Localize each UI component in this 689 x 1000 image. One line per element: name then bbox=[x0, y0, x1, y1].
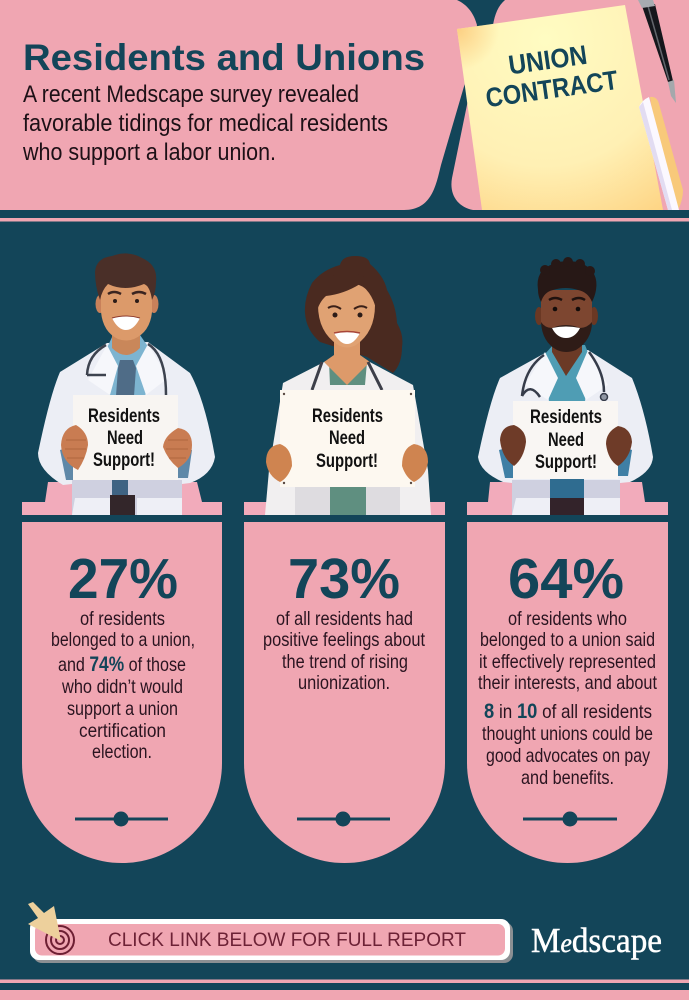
card 1 text: of residents bbox=[80, 608, 165, 630]
intro text bbox=[22, 81, 388, 166]
figure: male resident 2 with sign bbox=[478, 257, 653, 515]
icon: arrow pointer bbox=[28, 902, 61, 941]
card 3 text: belonged to a union said bbox=[480, 629, 655, 651]
icon: target bbox=[46, 926, 74, 954]
card 2 text: positive feelings about bbox=[263, 629, 425, 651]
card 1 top stripe bbox=[22, 482, 222, 515]
card 3 body bbox=[467, 522, 668, 863]
card 1 text: certification bbox=[79, 720, 166, 742]
button frame bbox=[30, 919, 513, 963]
bottom stripes bbox=[0, 980, 689, 1000]
card 3 top stripe bbox=[467, 482, 668, 515]
card 1 text: support a union bbox=[67, 698, 178, 720]
card 1 body bbox=[22, 522, 222, 863]
card 2 text: unionization. bbox=[298, 672, 390, 694]
button label: CLICK LINK BELOW FOR FULL REPORT bbox=[108, 930, 466, 951]
sign text: Support! bbox=[93, 450, 155, 471]
card 1 text: belonged to a union, bbox=[51, 629, 195, 651]
card 3 text bbox=[478, 608, 657, 789]
card 3 text: 8 in 10 of all residents bbox=[484, 700, 652, 723]
sign text: Need bbox=[548, 430, 584, 451]
card 3 stat: 64% bbox=[508, 547, 624, 611]
title: Residents and Unions bbox=[23, 37, 425, 78]
intro text: who support a labor union. bbox=[22, 139, 276, 166]
card 2 stat: 73% bbox=[288, 547, 400, 611]
call to action button bbox=[28, 902, 513, 963]
sign text: Residents bbox=[530, 407, 602, 428]
card 2 body bbox=[244, 522, 445, 863]
card 2 text: the trend of rising bbox=[282, 651, 408, 673]
stripe under header bbox=[0, 218, 689, 222]
card 2 top stripe bbox=[244, 502, 445, 515]
icon: union contract folder and pen: CONTRACT bbox=[484, 65, 620, 113]
sign text: Support! bbox=[316, 451, 378, 472]
intro text: A recent Medscape survey revealed bbox=[23, 81, 359, 108]
header pink shape left bbox=[0, 0, 477, 210]
figure: female resident with sign bbox=[265, 256, 431, 515]
sign text bbox=[312, 406, 383, 472]
card 3 text: and benefits. bbox=[521, 767, 614, 789]
card 3 text: good advocates on pay bbox=[486, 745, 650, 767]
sign text: Need bbox=[329, 428, 365, 449]
sign text bbox=[530, 407, 602, 473]
card 2 slider ornament bbox=[297, 812, 390, 826]
header panel bbox=[0, 0, 689, 210]
sign text: Support! bbox=[535, 452, 597, 473]
card 1 text bbox=[51, 608, 195, 763]
intro text: favorable tidings for medical residents bbox=[23, 110, 388, 137]
card 1 text: and 74% of those bbox=[58, 653, 186, 676]
card 2 text bbox=[263, 608, 425, 694]
card 3 text: of residents who bbox=[508, 608, 627, 630]
icon: union contract folder and pen bbox=[457, 0, 683, 210]
sign text: Residents bbox=[88, 406, 160, 427]
card 3 text: it effectively represented bbox=[479, 651, 656, 673]
Medscape logo: Medscape bbox=[531, 921, 662, 960]
panel: card 2 bbox=[244, 502, 445, 863]
card 3 slider ornament bbox=[523, 812, 617, 826]
panel: card 1 bbox=[22, 482, 222, 863]
icon: union contract folder and pen: UNION bbox=[507, 40, 589, 80]
sign text bbox=[88, 406, 160, 471]
card 1 slider ornament bbox=[75, 812, 168, 826]
card 3 text: their interests, and about bbox=[478, 672, 657, 694]
figure: male resident 1 with sign bbox=[38, 253, 215, 515]
sign text: Need bbox=[107, 428, 143, 449]
card 1 text: election. bbox=[92, 741, 152, 763]
card 1 text: who didn’t would bbox=[61, 676, 183, 698]
header pink shape right bbox=[451, 0, 689, 210]
sign text: Residents bbox=[312, 406, 383, 427]
card 1 stat: 27% bbox=[68, 547, 178, 611]
card 2 text: of all residents had bbox=[276, 608, 413, 630]
card 3 text: thought unions could be bbox=[482, 723, 653, 745]
panel: card 3 bbox=[467, 482, 668, 863]
